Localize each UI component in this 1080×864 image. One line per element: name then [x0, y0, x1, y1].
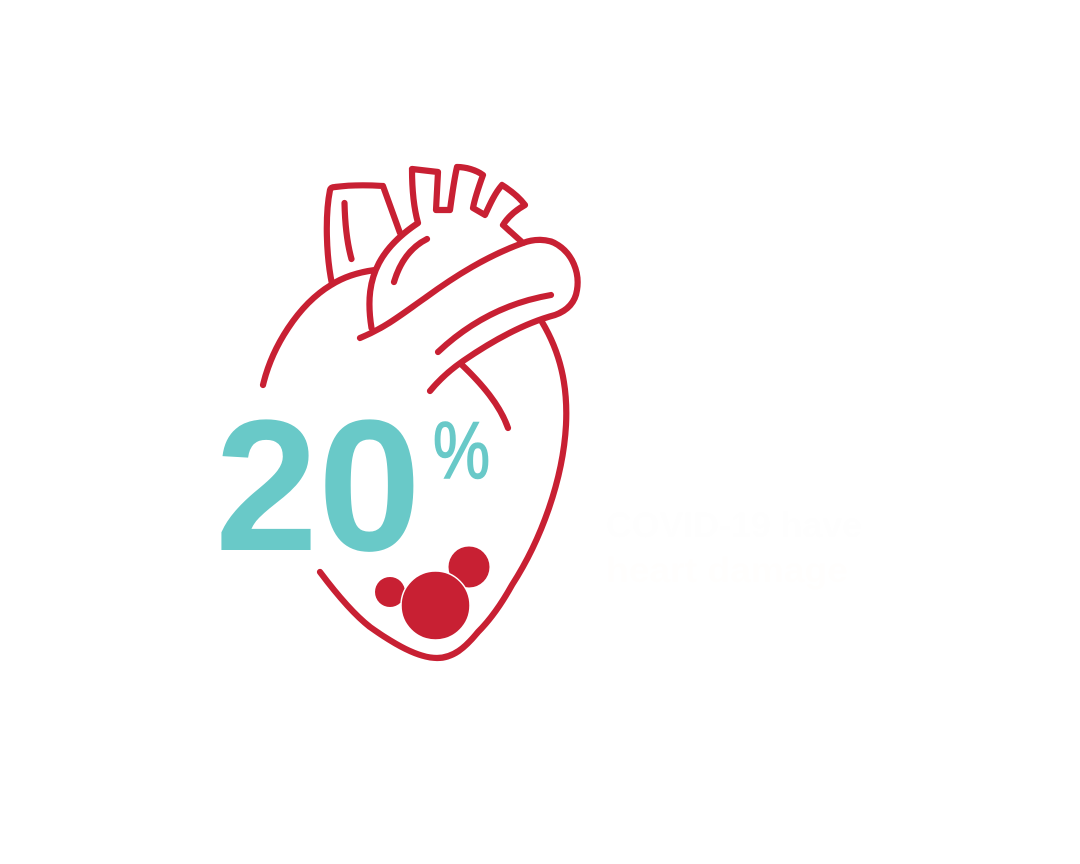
vena cava inner line [344, 203, 352, 259]
icon: blood clot cluster [375, 546, 490, 640]
heart left wall [263, 270, 375, 385]
percent sign: % [433, 406, 490, 496]
caption line 2: heart damage [606, 551, 848, 590]
pulmonary artery inner line [438, 295, 551, 352]
aortic arch and branches [369, 167, 525, 328]
heart right wall and apex [320, 322, 566, 658]
statistic: 20 percent [215, 381, 490, 590]
caption: near-white text [606, 506, 862, 590]
aortic arch highlight [394, 239, 427, 282]
number 20: 20 [215, 381, 421, 590]
coronary branch [461, 364, 508, 428]
caption line 1: COVID-19 have [606, 506, 862, 545]
superior vena cava [327, 185, 400, 284]
pulmonary artery [360, 240, 578, 391]
icon: anatomical heart outline [263, 167, 578, 658]
